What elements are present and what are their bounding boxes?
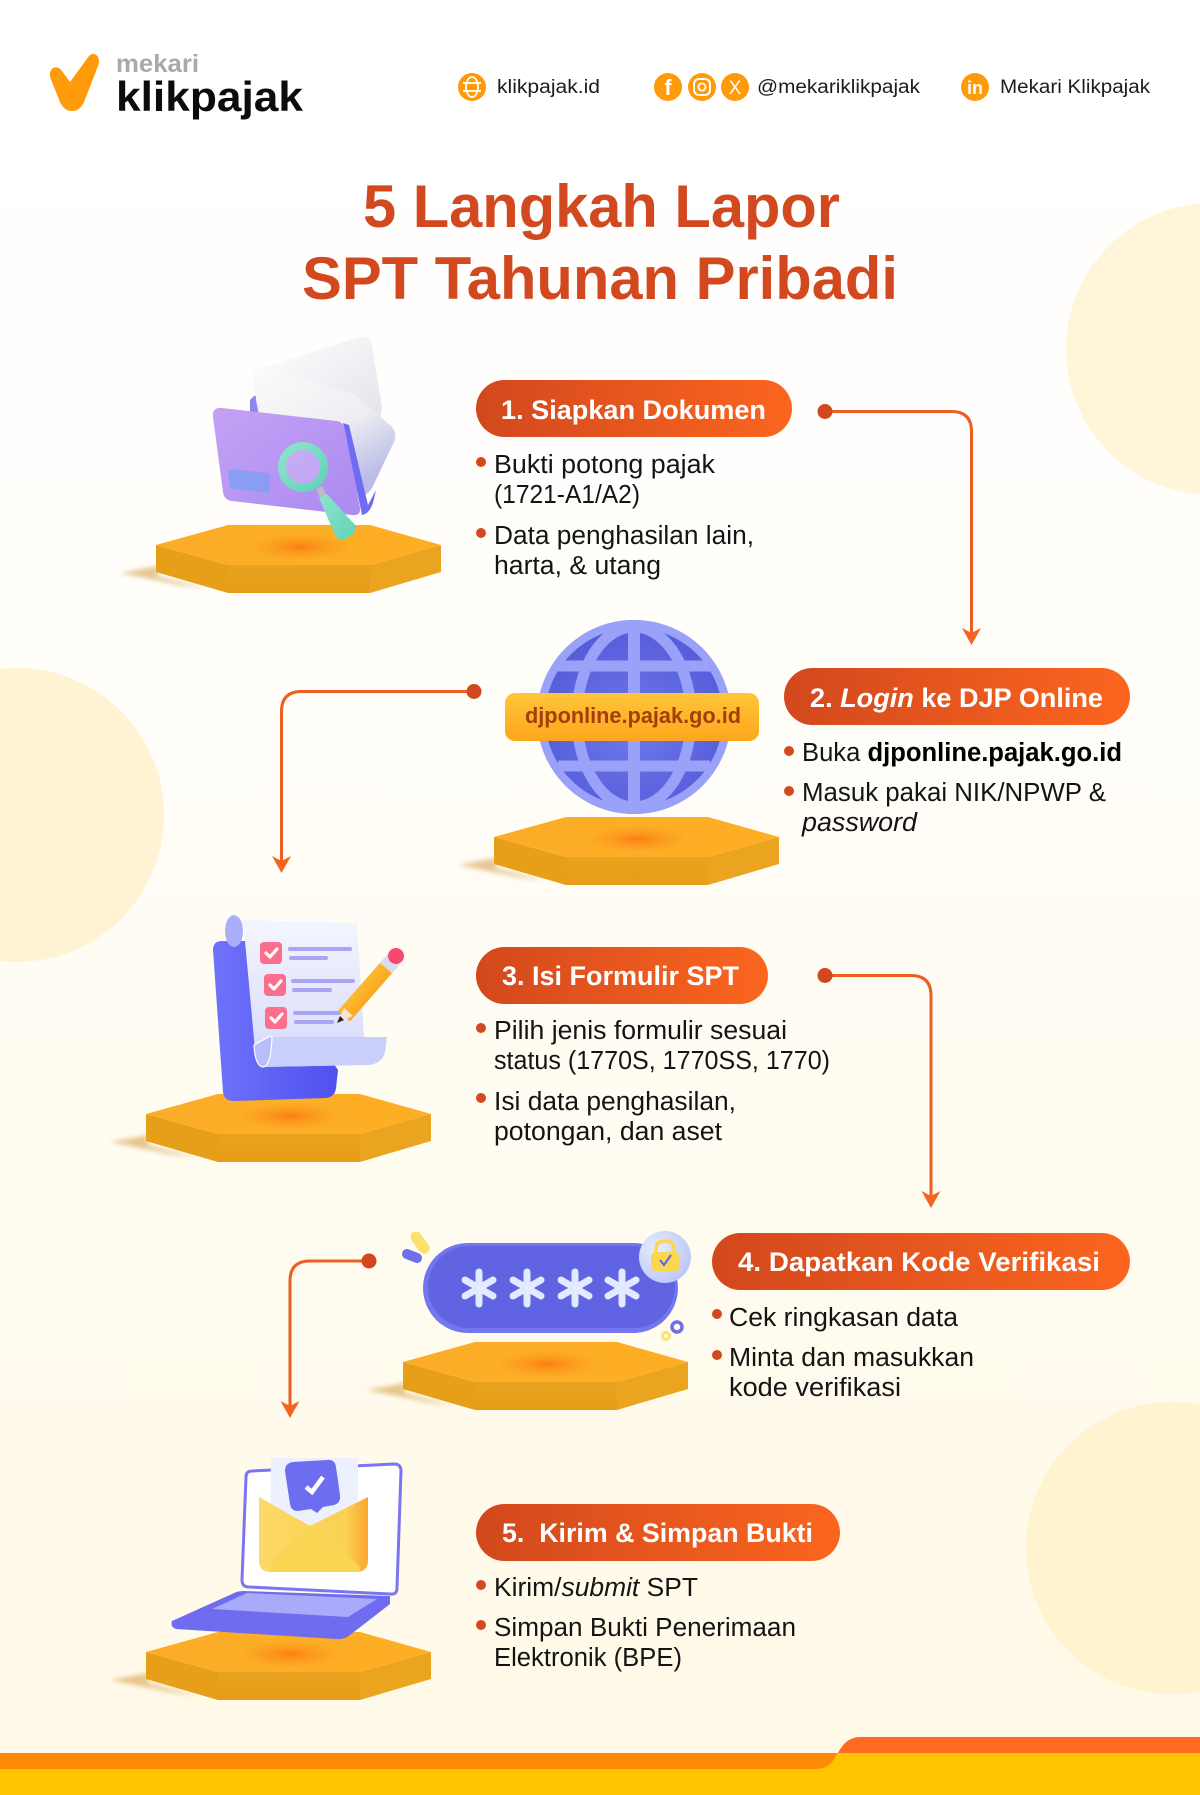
platform 5 <box>110 1632 431 1700</box>
step 1 list: Bukti potong pajak <box>494 451 715 479</box>
platform 2 <box>458 817 779 885</box>
step 4 list: Cek ringkasan data <box>729 1304 959 1332</box>
decorative circle: top right <box>1066 203 1200 495</box>
title <box>302 173 898 312</box>
header contact: website <box>458 73 600 101</box>
logo: mekari klikpajak <box>50 50 304 120</box>
step 2 list <box>784 739 1122 837</box>
title: 5 Langkah Lapor <box>363 173 840 240</box>
step 2 illustration: globe <box>458 620 779 885</box>
step 3 list: Isi data penghasilan, <box>494 1088 736 1116</box>
platform 4 <box>367 1342 688 1410</box>
step 5 badge: 5. Kirim & Simpan Bukti <box>502 1518 813 1548</box>
step 4 badge <box>712 1233 1130 1290</box>
header contact: linkedin: in <box>967 78 983 98</box>
url label <box>505 693 759 741</box>
step 4 illustration: password field <box>367 1231 691 1410</box>
folder icon <box>213 337 395 539</box>
step 1 list <box>476 451 754 580</box>
step 3 list: potongan, dan aset <box>494 1118 722 1146</box>
step 4 list <box>712 1304 974 1402</box>
step 1 list: (1721-A1/A2) <box>494 481 640 509</box>
logo: mekari klikpajak: klikpajak <box>116 73 304 120</box>
step 5 list: Elektronik (BPE) <box>494 1644 682 1672</box>
title: SPT Tahunan Pribadi <box>302 245 898 312</box>
step 1 list: harta, & utang <box>494 552 661 580</box>
footer bands <box>0 1737 1200 1795</box>
header contact: social handles: @mekariklikpajak <box>757 77 921 98</box>
step 1 illustration: folder and magnifier <box>120 337 441 593</box>
header contact: website: klikpajak.id <box>497 77 600 98</box>
step 5 badge <box>476 1504 840 1561</box>
step 3 list: status (1770S, 1770SS, 1770) <box>494 1047 830 1075</box>
arrow: step 2 to step 3 <box>272 684 482 873</box>
form icon <box>213 915 404 1101</box>
decorative circle: bottom right <box>1026 1402 1200 1694</box>
platform 1 <box>120 525 441 593</box>
step 1 badge <box>476 380 792 437</box>
globe icon <box>537 620 731 814</box>
platform 3 <box>110 1094 431 1162</box>
step 2 badge: 2. Login ke DJP Online <box>810 683 1103 713</box>
decorative circle: middle left <box>0 668 164 962</box>
step 3 list: Pilih jenis formulir sesuai <box>494 1017 787 1045</box>
arrow: step 3 to step 4 <box>818 968 940 1208</box>
password pill <box>423 1243 678 1333</box>
check badge <box>285 1460 340 1513</box>
step 3 list <box>476 1017 830 1146</box>
envelope <box>259 1458 368 1572</box>
header contact: social handles <box>654 73 921 101</box>
step 2 list: password <box>801 809 918 837</box>
step 1 list: Data penghasilan lain, <box>494 522 754 550</box>
header contact: linkedin: Mekari Klikpajak <box>1000 77 1151 98</box>
step 4 badge: 4. Dapatkan Kode Verifikasi <box>738 1247 1100 1277</box>
arrow: step 4 to step 5 <box>280 1254 376 1418</box>
header contact: social handles: X <box>729 78 742 99</box>
arrow: step 1 to step 2 <box>818 404 981 645</box>
pencil <box>337 948 404 1023</box>
step 4 list: Minta dan masukkan <box>729 1344 974 1372</box>
step 3 illustration: form and pencil <box>110 915 431 1162</box>
step 5 list: Kirim/submit SPT <box>494 1574 698 1602</box>
step 2 list: Buka djponline.pajak.go.id <box>802 739 1122 767</box>
logo: mekari klikpajak: mekari <box>116 50 199 78</box>
step 1 badge: 1. Siapkan Dokumen <box>501 395 766 425</box>
header contact: linkedin <box>961 73 1151 101</box>
url label: djponline.pajak.go.id <box>525 703 741 728</box>
step 5 list: Simpan Bukti Penerimaan <box>494 1614 796 1642</box>
step 2 list: Masuk pakai NIK/NPWP & <box>802 779 1106 807</box>
sparkles <box>407 1237 682 1340</box>
laptop <box>172 1464 401 1639</box>
step 3 badge: 3. Isi Formulir SPT <box>502 961 739 991</box>
step 5 illustration: laptop and envelope <box>110 1458 431 1700</box>
step 4 list: kode verifikasi <box>729 1374 901 1402</box>
lock badge <box>639 1231 691 1283</box>
step 2 badge <box>784 668 1130 725</box>
step 3 badge <box>476 947 768 1004</box>
header contact: social handles: f <box>664 75 672 100</box>
step 5 list <box>476 1574 796 1672</box>
